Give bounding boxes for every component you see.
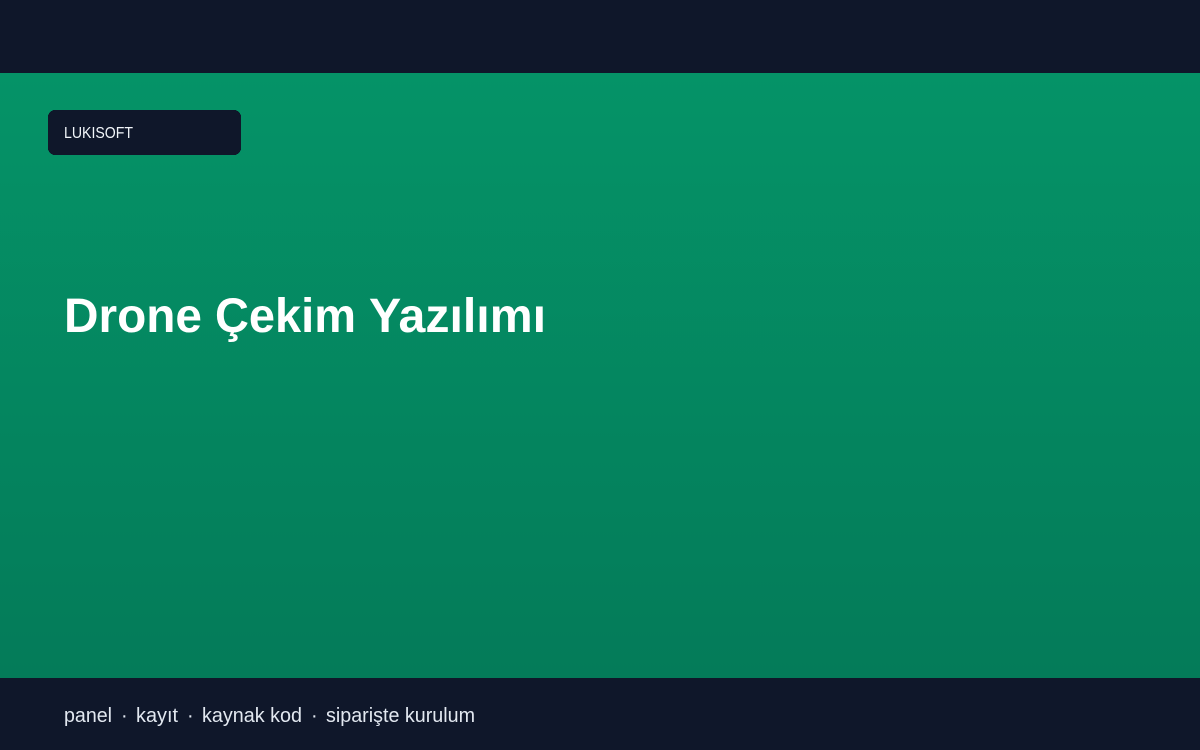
brand badge: LUKISOFT <box>64 125 133 142</box>
footer bar with feature list <box>0 678 1200 750</box>
top bar <box>0 0 1200 73</box>
footer bar with feature list: siparişte kurulum <box>326 705 475 727</box>
title: Çekim <box>215 290 356 343</box>
footer bar with feature list: kaynak kod <box>202 705 302 727</box>
footer bar with feature list: kayıt <box>136 705 178 727</box>
brand badge <box>48 110 241 155</box>
title: Drone <box>64 290 202 343</box>
footer bar with feature list: · <box>187 705 194 727</box>
title: Yazılımı <box>369 290 546 343</box>
title <box>64 290 546 343</box>
footer bar with feature list: panel <box>64 705 112 727</box>
footer bar with feature list: · <box>121 705 128 727</box>
footer bar with feature list: · <box>311 705 318 727</box>
